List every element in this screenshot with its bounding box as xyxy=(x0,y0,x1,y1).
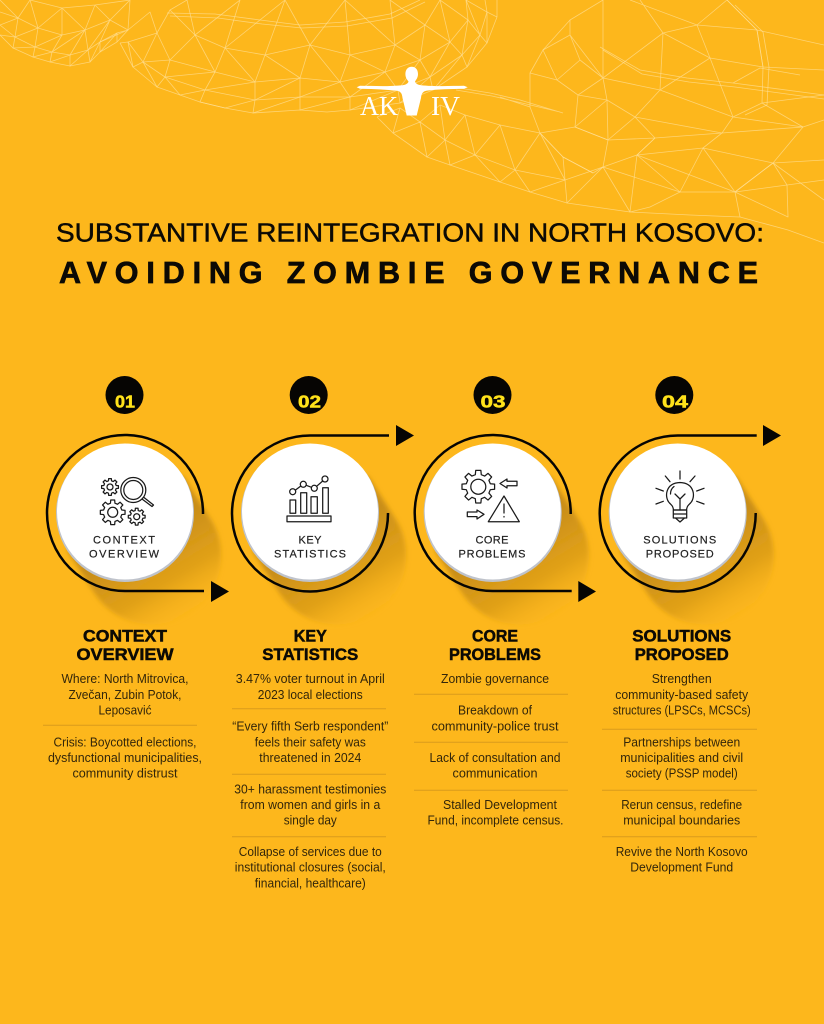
heading 1: CONTEXT xyxy=(83,627,168,646)
text: strengthen: structures (LPSCs, MCSCs) xyxy=(613,703,751,718)
title xyxy=(56,218,764,290)
panel: solutions proposed xyxy=(600,376,781,875)
text: crisis: Crisis: Boycotted elections, xyxy=(54,735,196,750)
heading 2: KEY xyxy=(294,627,327,646)
text: collapse: Collapse of services due to xyxy=(239,844,382,859)
text: harassment: single day xyxy=(284,813,337,828)
white circle 2 xyxy=(241,444,379,582)
white circle 1 xyxy=(56,444,194,582)
heading 2 xyxy=(262,627,358,664)
text: harassment xyxy=(234,781,387,828)
circle label 1 xyxy=(89,534,160,561)
text: safety: “Every fifth Serb respondent” xyxy=(232,719,388,734)
text: where: Zvečan, Zubin Potok, xyxy=(68,687,182,702)
text: partnerships xyxy=(620,735,743,781)
title line 2: AVOIDING ZOMBIE GOVERNANCE xyxy=(59,256,758,290)
circular arrow 3 xyxy=(415,435,596,602)
text: partnerships: Partnerships between xyxy=(623,735,740,750)
icon: gears and magnifier xyxy=(100,478,154,525)
text: breakdown: Breakdown of xyxy=(458,703,532,718)
text: safety: threatened in 2024 xyxy=(259,750,361,765)
circle label 3: PROBLEMS xyxy=(458,549,526,561)
circle label 4: PROPOSED xyxy=(646,549,714,561)
badge 02 xyxy=(290,376,328,414)
text: safety xyxy=(232,719,388,765)
circle label 2: KEY xyxy=(298,534,322,546)
circle label 2: STATISTICS xyxy=(274,549,346,561)
white circle 4 xyxy=(609,444,747,582)
text: breakdown: community-police trust xyxy=(432,719,559,734)
text: collapse: financial, healthcare) xyxy=(255,875,366,890)
text: stalled fund: Stalled Development xyxy=(443,797,557,812)
heading 4: SOLUTIONS xyxy=(632,627,731,646)
text: partnerships: society (PSSP model) xyxy=(626,766,738,781)
title line 1: SUBSTANTIVE REINTEGRATION IN NORTH KOSOVO: xyxy=(56,218,764,248)
text: consultation: communication xyxy=(452,766,538,781)
text: turnout: 3.47% voter turnout in April xyxy=(236,671,385,686)
text: crisis: dysfunctional municipalities, xyxy=(48,750,202,765)
text: stalled fund xyxy=(428,797,564,828)
text: where xyxy=(62,671,188,718)
text: revive fund: Revive the North Kosovo xyxy=(616,844,748,859)
text: safety: feels their safety was xyxy=(255,735,366,750)
circle label 4 xyxy=(643,534,716,561)
text: turnout xyxy=(236,671,385,702)
text: census: municipal boundaries xyxy=(623,813,741,828)
circle label 4: SOLUTIONS xyxy=(643,534,716,546)
heading 4 xyxy=(632,627,731,664)
badge 02: 02 xyxy=(298,392,321,412)
text: census: Rerun census, redefine xyxy=(621,797,742,812)
icon: light bulb xyxy=(656,471,704,522)
badge 03: 03 xyxy=(480,392,506,412)
circle label 1: CONTEXT xyxy=(93,534,155,546)
circle label 1: OVERVIEW xyxy=(89,549,160,561)
circular arrow 2 xyxy=(232,425,414,592)
heading 3: PROBLEMS xyxy=(449,645,541,664)
text: where: Where: North Mitrovica, xyxy=(62,671,188,686)
logo figure xyxy=(357,67,468,116)
icon: bar and line chart xyxy=(287,476,331,522)
text: zombie governance: Zombie governance xyxy=(441,671,549,686)
panel: context overview xyxy=(43,376,229,781)
text: census xyxy=(621,797,742,828)
text: stalled fund: Fund, incomplete census. xyxy=(428,813,564,828)
panel: key statistics xyxy=(232,376,414,890)
heading 4: PROPOSED xyxy=(635,645,729,664)
text: turnout: 2023 local elections xyxy=(258,687,363,702)
circle label 2 xyxy=(274,534,346,561)
white circle 3 xyxy=(424,444,562,582)
circle label 3 xyxy=(458,534,526,561)
heading 3: CORE xyxy=(472,627,518,646)
text: consultation xyxy=(430,750,560,781)
logo text IV: IV xyxy=(431,91,460,121)
badge 01 xyxy=(106,376,144,414)
text: where: Leposavić xyxy=(98,703,152,718)
badge 01: 01 xyxy=(115,392,135,412)
text: collapse: institutional closures (social, xyxy=(235,860,386,875)
text: consultation: Lack of consultation and xyxy=(430,750,560,765)
text: crisis: community distrust xyxy=(72,766,178,781)
text: partnerships: municipalities and civil xyxy=(620,750,743,765)
heading 3 xyxy=(449,627,541,664)
text: strengthen xyxy=(613,671,751,718)
text: crisis xyxy=(48,735,202,781)
badge 04 xyxy=(655,376,693,414)
circle label 3: CORE xyxy=(476,534,508,546)
text: collapse xyxy=(235,844,386,890)
badge 04: 04 xyxy=(662,392,688,412)
circular arrow 1 xyxy=(47,435,229,602)
heading 2: STATISTICS xyxy=(262,645,358,664)
text: harassment: 30+ harassment testimonies xyxy=(234,781,387,796)
logo text AK: AK xyxy=(360,91,398,121)
heading 1: OVERVIEW xyxy=(76,645,175,664)
panel: core problems xyxy=(414,376,596,828)
text: revive fund xyxy=(616,844,748,875)
logo: AKTIV xyxy=(357,67,468,121)
text: revive fund: Development Fund xyxy=(630,860,733,875)
text: strengthen: Strengthen xyxy=(652,671,712,686)
circular arrow 4 xyxy=(600,425,781,592)
text: strengthen: community-based safety xyxy=(615,687,749,702)
heading 1 xyxy=(76,627,175,664)
badge 03 xyxy=(474,376,512,414)
text: breakdown xyxy=(432,703,559,734)
icon: gear, arrows and warning xyxy=(462,470,519,522)
text: harassment: from women and girls in a xyxy=(240,797,381,812)
